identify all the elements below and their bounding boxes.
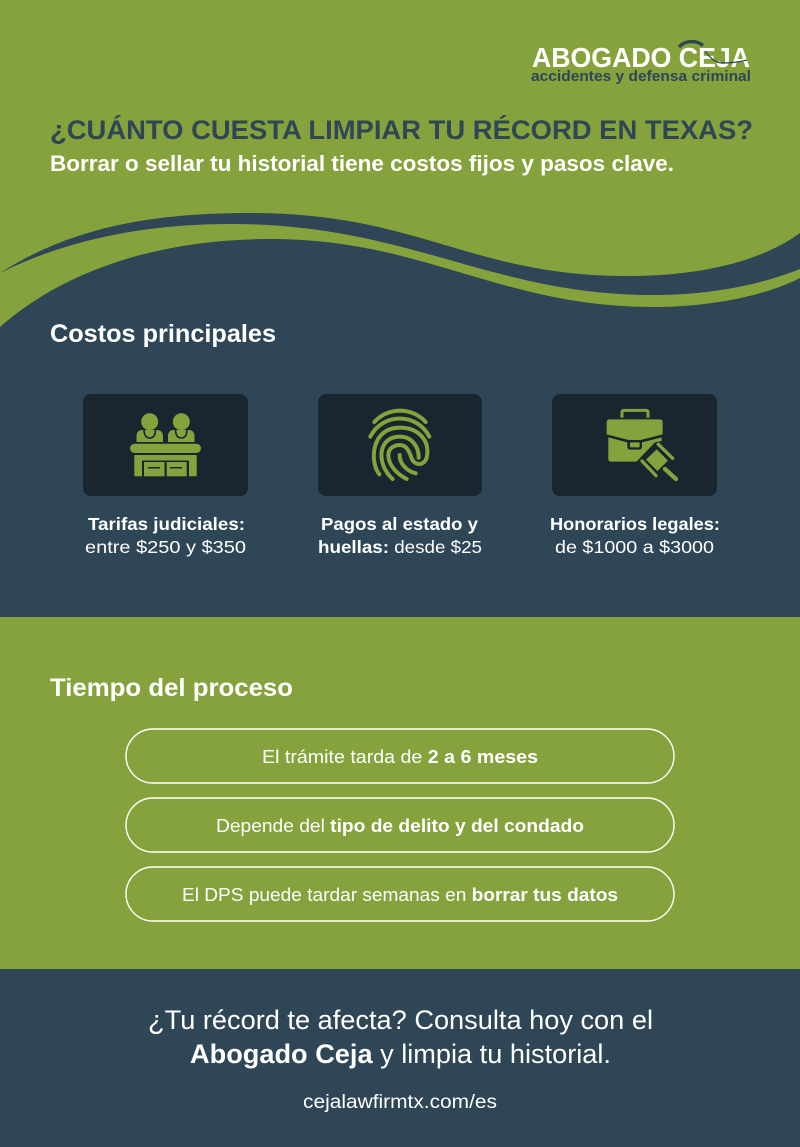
pill: duration: El trámite tarda de 2 a 6 meses: [262, 747, 538, 767]
call to action: Abogado Ceja y limpia tu historial.: [190, 1039, 611, 1069]
icon: briefcase and gavel: [607, 410, 676, 479]
logo: [531, 42, 751, 85]
subtitle: Borrar o sellar tu historial tiene costos fijos y pasos clave.: [50, 151, 674, 176]
panel: honorarios legales: [550, 394, 720, 557]
call to action: [148, 1005, 653, 1069]
footer panel: [0, 969, 800, 1147]
wave header divider: [0, 213, 800, 617]
value: pagos al estado: huellas: desde $25: [318, 537, 482, 557]
pill: DPS: El DPS puede tardar semanas en borrar tus datos: [182, 885, 618, 905]
label: tarifas judiciales: Tarifas judiciales:: [88, 514, 245, 534]
pill: duration: [126, 729, 674, 783]
label: pagos al estado: Pagos al estado y: [321, 514, 478, 534]
icon: fingerprint: [370, 411, 429, 479]
logo: accidentes y defensa criminal: [531, 68, 751, 85]
label: honorarios legales: Honorarios legales:: [550, 514, 720, 534]
website url: cejalawfirmtx.com/es: [303, 1092, 497, 1113]
panel: pagos al estado: [318, 394, 482, 557]
call to action: ¿Tu récord te afecta? Consulta hoy con el: [148, 1005, 653, 1035]
panel: tarifas judiciales: [83, 394, 248, 557]
heading: costos principales: Costos principales: [50, 320, 276, 348]
value: tarifas judiciales: entre $250 y $350: [85, 537, 246, 557]
icon: judges at bench: [130, 413, 201, 476]
title: ¿CUÁNTO CUESTA LIMPIAR TU RÉCORD EN TEXAS?: [50, 114, 753, 145]
pill: DPS: [126, 867, 674, 921]
card: tarifas judiciales: [83, 394, 248, 496]
value: honorarios legales: de $1000 a $3000: [555, 537, 714, 557]
card: pagos al estado: [318, 394, 482, 496]
logo: ABOGADO CEJA: [532, 42, 750, 73]
pill: depends: Depende del tipo de delito y del condado: [216, 816, 584, 836]
card: honorarios legales: [552, 394, 717, 496]
pill: depends: [126, 798, 674, 852]
heading: tiempo del proceso: Tiempo del proceso: [50, 674, 293, 702]
